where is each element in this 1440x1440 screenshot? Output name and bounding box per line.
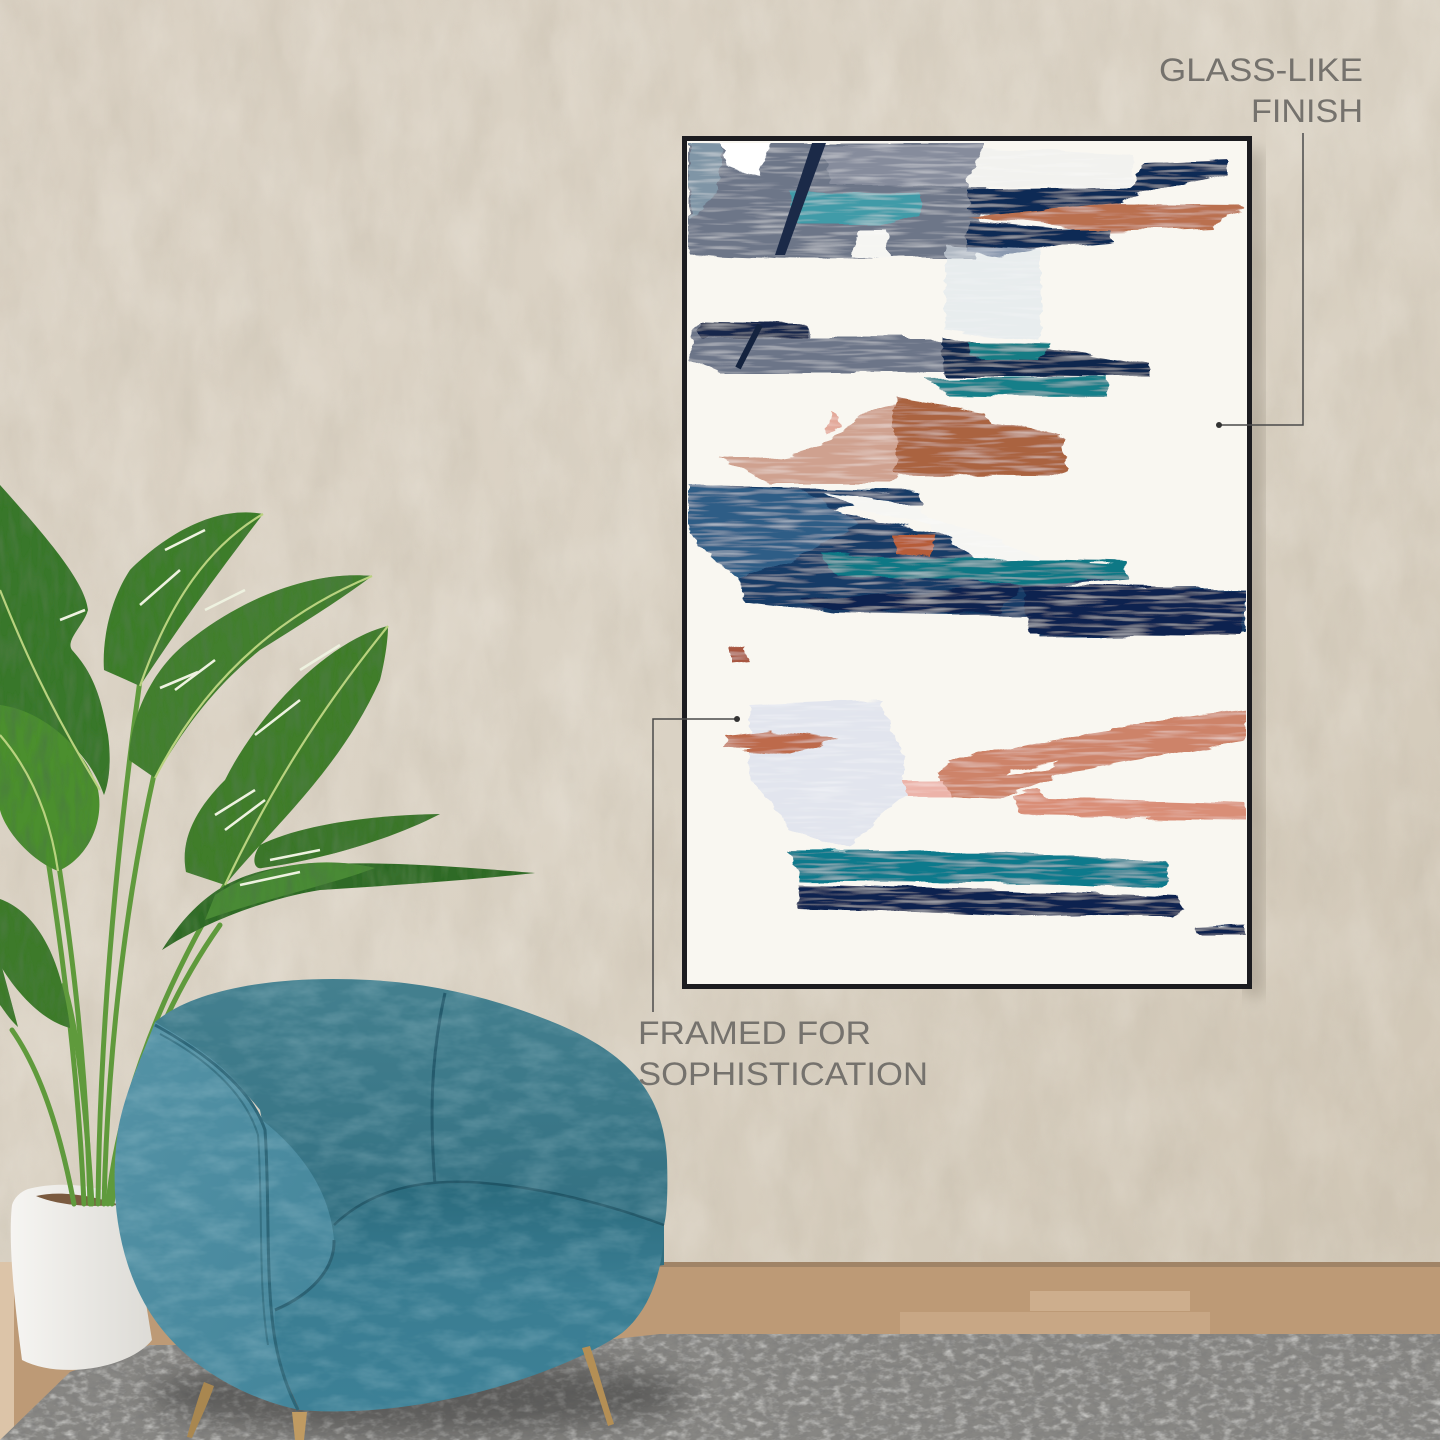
stroke group: dark wave	[688, 485, 1246, 637]
plant	[0, 485, 535, 1204]
armchair arm	[115, 1022, 334, 1410]
large right leaf	[185, 626, 388, 885]
leaf right of centre	[129, 575, 372, 778]
leaf midribs	[0, 514, 388, 885]
callout: glass-like finish	[1159, 52, 1363, 428]
armchair legs	[582, 1346, 614, 1426]
callout: framed for sophistication: FRAMED FOR	[638, 1015, 871, 1051]
rug	[0, 1334, 1440, 1440]
plant stems	[12, 680, 225, 1204]
stroke group: peach	[905, 710, 1246, 820]
callout: glass-like finish: GLASS-LIKE	[1159, 52, 1363, 88]
stroke group: pale wash	[945, 245, 1040, 340]
stroke group: top band	[688, 143, 1245, 260]
frame	[684, 138, 1250, 986]
callout: framed for sophistication: SOPHISTICATION	[638, 1056, 928, 1092]
armchair seat	[274, 1182, 664, 1411]
stroke group: brown centre	[718, 398, 1067, 483]
callout: glass-like finish: FINISH	[1251, 93, 1363, 129]
leaf white ribs	[60, 530, 340, 885]
floor	[0, 1262, 1440, 1440]
stroke group: second band	[690, 322, 1150, 396]
plant leaves	[0, 485, 535, 1028]
framed painting	[684, 138, 1250, 986]
leaf mid left	[0, 705, 99, 871]
armchair back	[155, 979, 667, 1320]
lower right leaves	[254, 814, 440, 868]
leaf lower left	[0, 899, 70, 1028]
stroke group: pale wash lower	[750, 700, 905, 850]
armchair shadow	[150, 1357, 690, 1433]
stroke group: teal and navy lines	[790, 852, 1246, 936]
stroke group: small red marks	[730, 645, 750, 662]
glass reflection streaks	[738, 143, 826, 368]
armchair	[105, 975, 675, 1440]
leaf top left	[0, 485, 110, 795]
leaf top centre	[104, 512, 263, 686]
callout: framed for sophistication	[638, 716, 928, 1092]
plant pot	[11, 1185, 152, 1370]
painting shadow	[1244, 150, 1264, 995]
